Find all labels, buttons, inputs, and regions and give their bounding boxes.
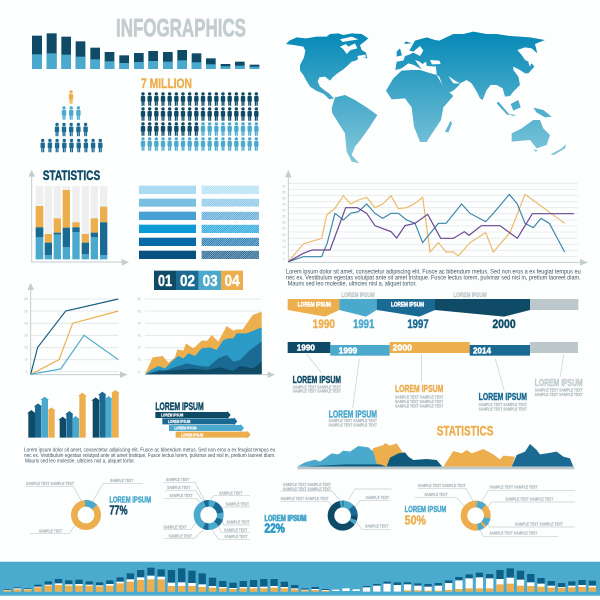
donut 4: 50 percent: SAMPLE TEXT SAMPLE TEXT bbox=[490, 485, 538, 490]
line chart: three series: 20 bbox=[282, 233, 286, 237]
line chart: three lines left: 20 bbox=[24, 346, 28, 350]
heading and arrow ribbons bbox=[155, 401, 251, 439]
map inland waters bbox=[340, 37, 460, 83]
donut 4: 50 percent: LOREM IPSUM bbox=[405, 504, 446, 514]
donut 2: 22 percent light: SAMPLE TEXT bbox=[226, 519, 250, 524]
donut 3: dark: SAMPLE TEXT SAMPLE TEXT bbox=[283, 486, 331, 491]
donut 1: 77 percent: SAMPLE TEXT bbox=[39, 528, 62, 533]
numbered tabs 01 to 04 bbox=[154, 271, 243, 290]
timeline: ribbon years: 2000 bbox=[492, 317, 516, 331]
donut 2: 22 percent light: LOREM IPSUM bbox=[264, 513, 307, 523]
donut 1: 77 percent: 77% bbox=[109, 502, 128, 517]
timeline: stepped bar with callouts: LOREM IPSUM bbox=[395, 384, 443, 395]
timeline: stepped bar with callouts: SAMPLE TEXT SAMPLE TEXT bbox=[395, 395, 443, 400]
timeline: ribbon years: 1997 bbox=[407, 317, 429, 331]
chart: stacked statistics bars bbox=[28, 170, 129, 266]
donut 1: 77 percent: SAMPLE TEXT SAMPLE TEXT bbox=[26, 481, 74, 486]
line chart: three lines left: 50 bbox=[24, 309, 28, 313]
timeline: stepped bar with callouts: SAMPLE TEXT SAMPLE TEXT bbox=[329, 422, 377, 427]
donut 4: 50 percent: SAMPLE TEXT SAMPLE TEXT bbox=[418, 483, 466, 488]
timeline: stepped bar with callouts: LOREM IPSUM bbox=[329, 409, 377, 420]
line chart: three lines left: 40 bbox=[24, 321, 28, 325]
donut 2: 22 percent light: SAMPLE TEXT bbox=[166, 477, 189, 482]
timeline: ribbon years bbox=[288, 292, 578, 331]
text block: paragraph right: Mauris sed leo molestie, ultricies nisl a, aliquet tortor. bbox=[288, 281, 417, 288]
donut 3: dark: SAMPLE TEXT bbox=[365, 524, 388, 529]
footer band bar chart bbox=[0, 562, 600, 596]
heading and arrow ribbons: LOREM IPSUM bbox=[161, 413, 183, 418]
text block: paragraph left: nec ex. Vestibulum egestas volutpat ante sit amet tristique. Fusce lectus lorem, pulvinar sed nisl in, pretium laoreet diam. bbox=[24, 453, 276, 459]
donut 1: 77 percent: SAMPLE TEXT bbox=[110, 478, 133, 483]
donut 4: 50 percent: SAMPLE TEXT SAMPLE TEXT bbox=[515, 521, 563, 526]
line chart: three series: 35 bbox=[282, 214, 286, 218]
bar chart: top stacked bars bbox=[32, 33, 259, 69]
timeline: stepped bar with callouts: LOREM IPSUM bbox=[479, 392, 527, 403]
line chart: three series: 45 bbox=[282, 202, 286, 206]
icon: 7 million people grid bbox=[141, 92, 259, 151]
donut 2: 22 percent light: SAMPLE TEXT bbox=[224, 534, 248, 539]
line chart: three series: 0 bbox=[283, 257, 285, 261]
heading and arrow ribbons: LOREM IPSUM bbox=[174, 426, 197, 431]
numbered tabs 01 to 04: 04 bbox=[225, 273, 240, 290]
timeline: ribbon years: LOREM IPSUM bbox=[298, 302, 331, 309]
line chart: three lines left: 10 bbox=[24, 358, 28, 362]
numbered tabs 01 to 04: 03 bbox=[203, 273, 218, 290]
text block: paragraph left: Lorem ipsum dolor sit amet, consectetur adipiscing elit. Fusce ac bibendum metus. Sed non eros a ex feugiat tempus eu bbox=[24, 448, 275, 454]
line chart: three series: 5 bbox=[283, 251, 285, 255]
donut 4: 50 percent bbox=[405, 483, 575, 536]
donut 2: 22 percent light: SAMPLE TEXT bbox=[167, 485, 190, 490]
donut 3: dark: SAMPLE TEXT bbox=[366, 495, 389, 500]
timeline: stepped bar with callouts: SAMPLE TEXT SAMPLE TEXT bbox=[395, 404, 443, 409]
donut 1: 77 percent: LOREM IPSUM bbox=[109, 494, 151, 504]
timeline: stepped bar with callouts: 1990 bbox=[297, 342, 315, 352]
line chart: three series: 55 bbox=[282, 190, 286, 194]
line chart: three lines left: 30 bbox=[24, 334, 28, 338]
donut 2: 22 percent light: SAMPLE TEXT bbox=[219, 490, 242, 495]
area chart: layered growth: 60 bbox=[137, 297, 141, 301]
donut 3: dark: SAMPLE TEXT SAMPLE TEXT bbox=[283, 482, 331, 487]
line chart: three lines left: 60 bbox=[24, 297, 28, 301]
title: INFOGRAPHICS bbox=[116, 14, 246, 42]
line chart: three series: 10 bbox=[282, 245, 286, 249]
donut 2: 22 percent light: SAMPLE TEXT bbox=[169, 493, 193, 498]
line chart: three series bbox=[282, 170, 588, 266]
text block: paragraph left bbox=[24, 448, 276, 465]
line chart: three series: 25 bbox=[282, 227, 286, 231]
timeline: stepped bar with callouts: SAMPLE TEXT SAMPLE TEXT bbox=[535, 392, 583, 397]
world map bbox=[286, 32, 566, 163]
timeline: stepped bar with callouts: LOREM IPSUM bbox=[293, 375, 341, 386]
area chart: layered growth: 40 bbox=[137, 321, 141, 325]
timeline: stepped bar with callouts: 2014 bbox=[473, 345, 491, 355]
timeline: ribbon years: LOREM IPSUM bbox=[391, 302, 424, 309]
timeline: ribbon years: 1991 bbox=[353, 317, 375, 331]
area chart: layered growth: 30 bbox=[137, 334, 141, 338]
donut 4: 50 percent: 50% bbox=[405, 512, 426, 527]
area chart: layered growth bbox=[137, 297, 275, 378]
timeline: stepped bar with callouts: 1999 bbox=[339, 345, 358, 355]
line chart: three series: 40 bbox=[282, 208, 286, 212]
line chart: three lines left: 0 bbox=[25, 370, 27, 374]
area chart: layered growth: 0 bbox=[138, 370, 140, 374]
donut 4: 50 percent: SAMPLE TEXT SAMPLE TEXT bbox=[505, 496, 553, 501]
line chart: three series: 15 bbox=[282, 239, 286, 243]
heading and arrow ribbons: LOREM IPSUM bbox=[155, 401, 204, 413]
donut 1: 77 percent bbox=[26, 478, 151, 534]
donut 3: dark: SAMPLE TEXT SAMPLE TEXT bbox=[281, 496, 329, 501]
timeline: stepped bar with callouts: SAMPLE TEXT SAMPLE TEXT bbox=[293, 389, 341, 394]
timeline: stepped bar with callouts: SAMPLE TEXT SAMPLE TEXT bbox=[479, 402, 527, 407]
line chart: three lines left bbox=[24, 283, 127, 378]
line chart: three series: 50 bbox=[282, 196, 286, 200]
timeline: ribbon years: LOREM IPSUM bbox=[453, 292, 487, 299]
timeline: stepped bar with callouts bbox=[288, 342, 583, 427]
donut 3: dark bbox=[264, 482, 392, 536]
donut 2: 22 percent light: SAMPLE TEXT bbox=[224, 527, 247, 532]
colour swatches bbox=[139, 186, 259, 259]
timeline: ribbon years: LOREM IPSUM bbox=[341, 292, 375, 299]
donut 4: 50 percent: SAMPLE TEXT SAMPLE TEXT bbox=[489, 531, 537, 536]
donut 4: 50 percent: SAMPLE TEXT bbox=[424, 492, 448, 497]
timeline: stepped bar with callouts: 2000 bbox=[393, 343, 412, 353]
timeline: stepped bar with callouts: SAMPLE TEXT SAMPLE TEXT bbox=[535, 388, 583, 393]
icon: people pyramid bbox=[40, 90, 102, 152]
bar chart: arrow columns bbox=[27, 390, 120, 438]
donut 3: dark: 22% bbox=[264, 521, 285, 536]
donut 2: 22 percent light bbox=[163, 477, 307, 539]
area chart: layered growth: 20 bbox=[137, 346, 141, 350]
timeline: stepped bar with callouts: SAMPLE TEXT SAMPLE TEXT bbox=[479, 406, 527, 411]
timeline: stepped bar with callouts: SAMPLE TEXT SAMPLE TEXT bbox=[293, 384, 341, 389]
area chart: layered growth: 50 bbox=[137, 309, 141, 313]
timeline: ribbon years: 1990 bbox=[313, 317, 335, 331]
donut 3: dark: LOREM IPSUM bbox=[264, 513, 306, 523]
text block: paragraph right bbox=[286, 268, 581, 288]
timeline: stepped bar with callouts: SAMPLE TEXT SAMPLE TEXT bbox=[395, 399, 443, 404]
donut 2: 22 percent light: 22% bbox=[264, 521, 285, 536]
line chart: three series: 60 bbox=[282, 184, 286, 188]
donut 2: 22 percent light: SAMPLE TEXT bbox=[163, 524, 187, 529]
heading and arrow ribbons: LOREM IPSUM bbox=[168, 419, 190, 424]
area chart: layered growth: 10 bbox=[137, 358, 141, 362]
timeline: stepped bar with callouts: SAMPLE TEXT SAMPLE TEXT bbox=[329, 418, 377, 423]
area chart: mountain silhouettes bbox=[297, 443, 574, 469]
donut 2: 22 percent light: SAMPLE TEXT bbox=[226, 502, 249, 507]
donut 2: 22 percent light: SAMPLE TEXT bbox=[169, 533, 192, 538]
heading: 7 million: 7 MILLION bbox=[141, 75, 192, 91]
heading: statistics: STATISTICS bbox=[43, 167, 100, 183]
numbered tabs 01 to 04: 01 bbox=[158, 273, 172, 290]
heading and arrow ribbons: LOREM IPSUM bbox=[181, 432, 203, 437]
heading: statistics orange: STATISTICS bbox=[437, 423, 493, 439]
text block: paragraph left: Mauris sed leo molestie, ultricies nisl a, aliquet tortor. bbox=[25, 459, 135, 465]
numbered tabs 01 to 04: 02 bbox=[180, 273, 195, 290]
line chart: three series: 30 bbox=[282, 221, 286, 225]
